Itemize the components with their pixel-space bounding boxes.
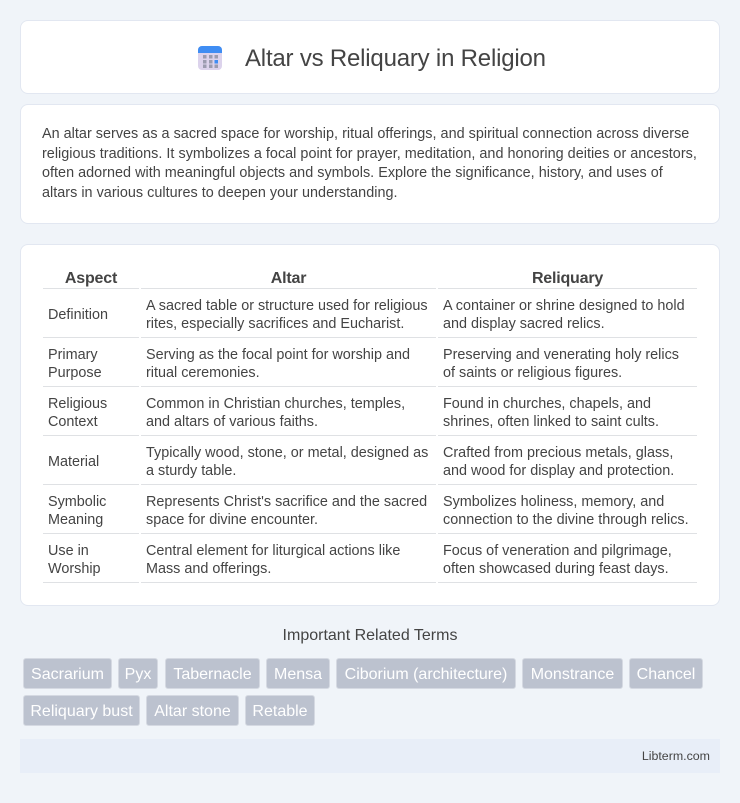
row: Definition: Definition — [48, 307, 108, 323]
row: Primary Purpose: Serving as the focal point for worship and — [146, 347, 410, 363]
tag: Reliquary bust — [30, 703, 133, 720]
row: Use in Worship: Mass and offerings. — [146, 561, 271, 577]
tag: Sacrarium — [31, 666, 104, 683]
table header: Altar — [271, 270, 306, 287]
row: Use in Worship — [43, 543, 697, 583]
tag: Tabernacle — [173, 666, 252, 683]
row: Primary Purpose: of saints or religious figures. — [443, 365, 622, 381]
tag — [266, 658, 330, 689]
row: Definition: rites, especially sacrifices and Eucharist. — [146, 316, 404, 332]
row: Use in Worship: Use in — [48, 543, 89, 559]
row: Use in Worship: Focus of veneration and pilgrimage, — [443, 543, 672, 559]
table header: Aspect — [65, 270, 117, 287]
footer credit: Libterm.com — [642, 749, 710, 763]
row: Definition — [43, 298, 697, 338]
icon: calendar — [198, 46, 222, 70]
tag — [245, 695, 315, 726]
tag: Altar stone — [154, 703, 231, 720]
tag — [146, 695, 239, 726]
intro text: altars in various cultures to deepen your understanding. — [42, 184, 398, 200]
row: Material: Crafted from precious metals, glass, — [443, 445, 673, 461]
tag — [23, 658, 112, 689]
tag: Retable — [252, 703, 308, 720]
row: Use in Worship: Worship — [48, 561, 101, 577]
row: Primary Purpose — [43, 347, 697, 387]
row: Symbolic Meaning: connection to the divine through relics. — [443, 512, 689, 528]
footer bar — [20, 739, 720, 773]
comparison table panel — [20, 244, 720, 606]
tag: Mensa — [274, 666, 322, 683]
tag — [522, 658, 623, 689]
row: Definition: A sacred table or structure used for religious — [146, 298, 428, 314]
intro text — [42, 126, 697, 200]
row: Religious Context: Common in Christian churches, temples, — [146, 396, 405, 412]
row: Material: Typically wood, stone, or metal, designed as — [146, 445, 428, 461]
row: Use in Worship: Central element for liturgical actions like — [146, 543, 400, 559]
tag: Pyx — [125, 666, 151, 683]
row: Symbolic Meaning — [43, 494, 697, 534]
tag — [336, 658, 516, 689]
title: Altar vs Reliquary in Religion — [245, 45, 546, 72]
intro text: An altar serves as a sacred space for worship, ritual offerings, and spiritual connection across diverse — [42, 126, 689, 142]
table header — [43, 270, 697, 289]
row: Symbolic Meaning: Represents Christ's sacrifice and the sacred — [146, 494, 427, 510]
row: Definition: A container or shrine designed to hold — [443, 298, 685, 314]
row: Symbolic Meaning: Meaning — [48, 512, 103, 528]
row: Material: a sturdy table. — [146, 463, 236, 479]
header panel — [20, 20, 720, 94]
row: Definition: and display sacred relics. — [443, 316, 605, 332]
related terms tags — [23, 658, 703, 726]
tag — [23, 695, 140, 726]
tag — [165, 658, 260, 689]
intro text: religious traditions. It symbolizes a focal point for prayer, meditation, and honoring deities or ancestors, — [42, 146, 697, 162]
row: Symbolic Meaning: space for divine encounter. — [146, 512, 318, 528]
row: Primary Purpose: Preserving and venerating holy relics — [443, 347, 679, 363]
intro text panel — [20, 104, 720, 224]
row: Religious Context: Religious — [48, 396, 107, 412]
row: Religious Context: Context — [48, 414, 98, 430]
row: Primary Purpose: Purpose — [48, 365, 102, 381]
row: Religious Context: Found in churches, chapels, and — [443, 396, 651, 412]
tag — [118, 658, 158, 689]
tag: Ciborium (architecture) — [345, 666, 507, 683]
row: Symbolic Meaning: Symbolic — [48, 494, 106, 510]
table header: Reliquary — [532, 270, 603, 287]
tag — [629, 658, 703, 689]
tag: Monstrance — [531, 666, 614, 683]
row: Material — [43, 445, 697, 485]
row: Religious Context — [43, 396, 697, 436]
row: Primary Purpose: Primary — [48, 347, 98, 363]
row: Material: Material — [48, 454, 99, 470]
row: Symbolic Meaning: Symbolizes holiness, memory, and — [443, 494, 664, 510]
related terms heading: Important Related Terms — [283, 627, 457, 644]
comparison table — [43, 270, 697, 583]
row: Use in Worship: often showcased during feast days. — [443, 561, 669, 577]
tag: Chancel — [637, 666, 695, 683]
intro text: often adorned with meaningful objects and symbols. Explore the significance, history, and uses of — [42, 165, 663, 181]
row: Religious Context: and altars of various faiths. — [146, 414, 318, 430]
row: Religious Context: shrines, often linked to saint cults. — [443, 414, 659, 430]
row: Material: and wood for display and protection. — [443, 463, 674, 479]
row: Primary Purpose: ritual ceremonies. — [146, 365, 260, 381]
